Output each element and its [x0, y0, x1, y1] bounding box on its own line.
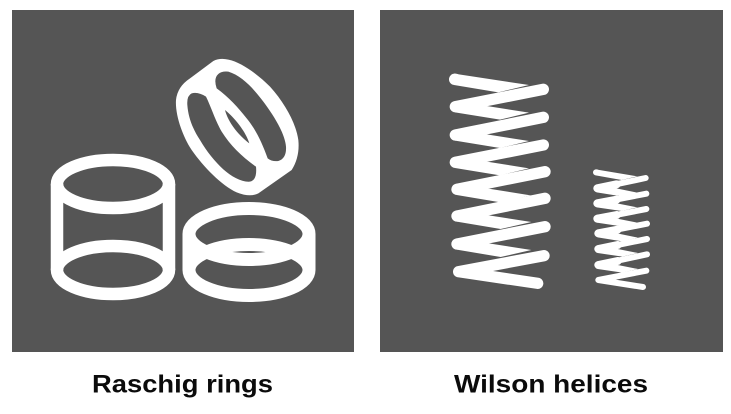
- icon: tall Raschig ring: [57, 160, 169, 294]
- panel: Wilson helices: [380, 10, 723, 352]
- panel: Raschig rings: [12, 10, 354, 352]
- icon: short Raschig ring: [189, 208, 309, 296]
- icon: large Wilson helix: [454, 74, 545, 283]
- label: Wilson helices: Wilson helices: [454, 370, 648, 398]
- icon: tilted Raschig ring: [176, 59, 299, 195]
- label: Raschig rings: Raschig rings: [92, 370, 273, 398]
- icon: small Wilson helix: [596, 169, 647, 287]
